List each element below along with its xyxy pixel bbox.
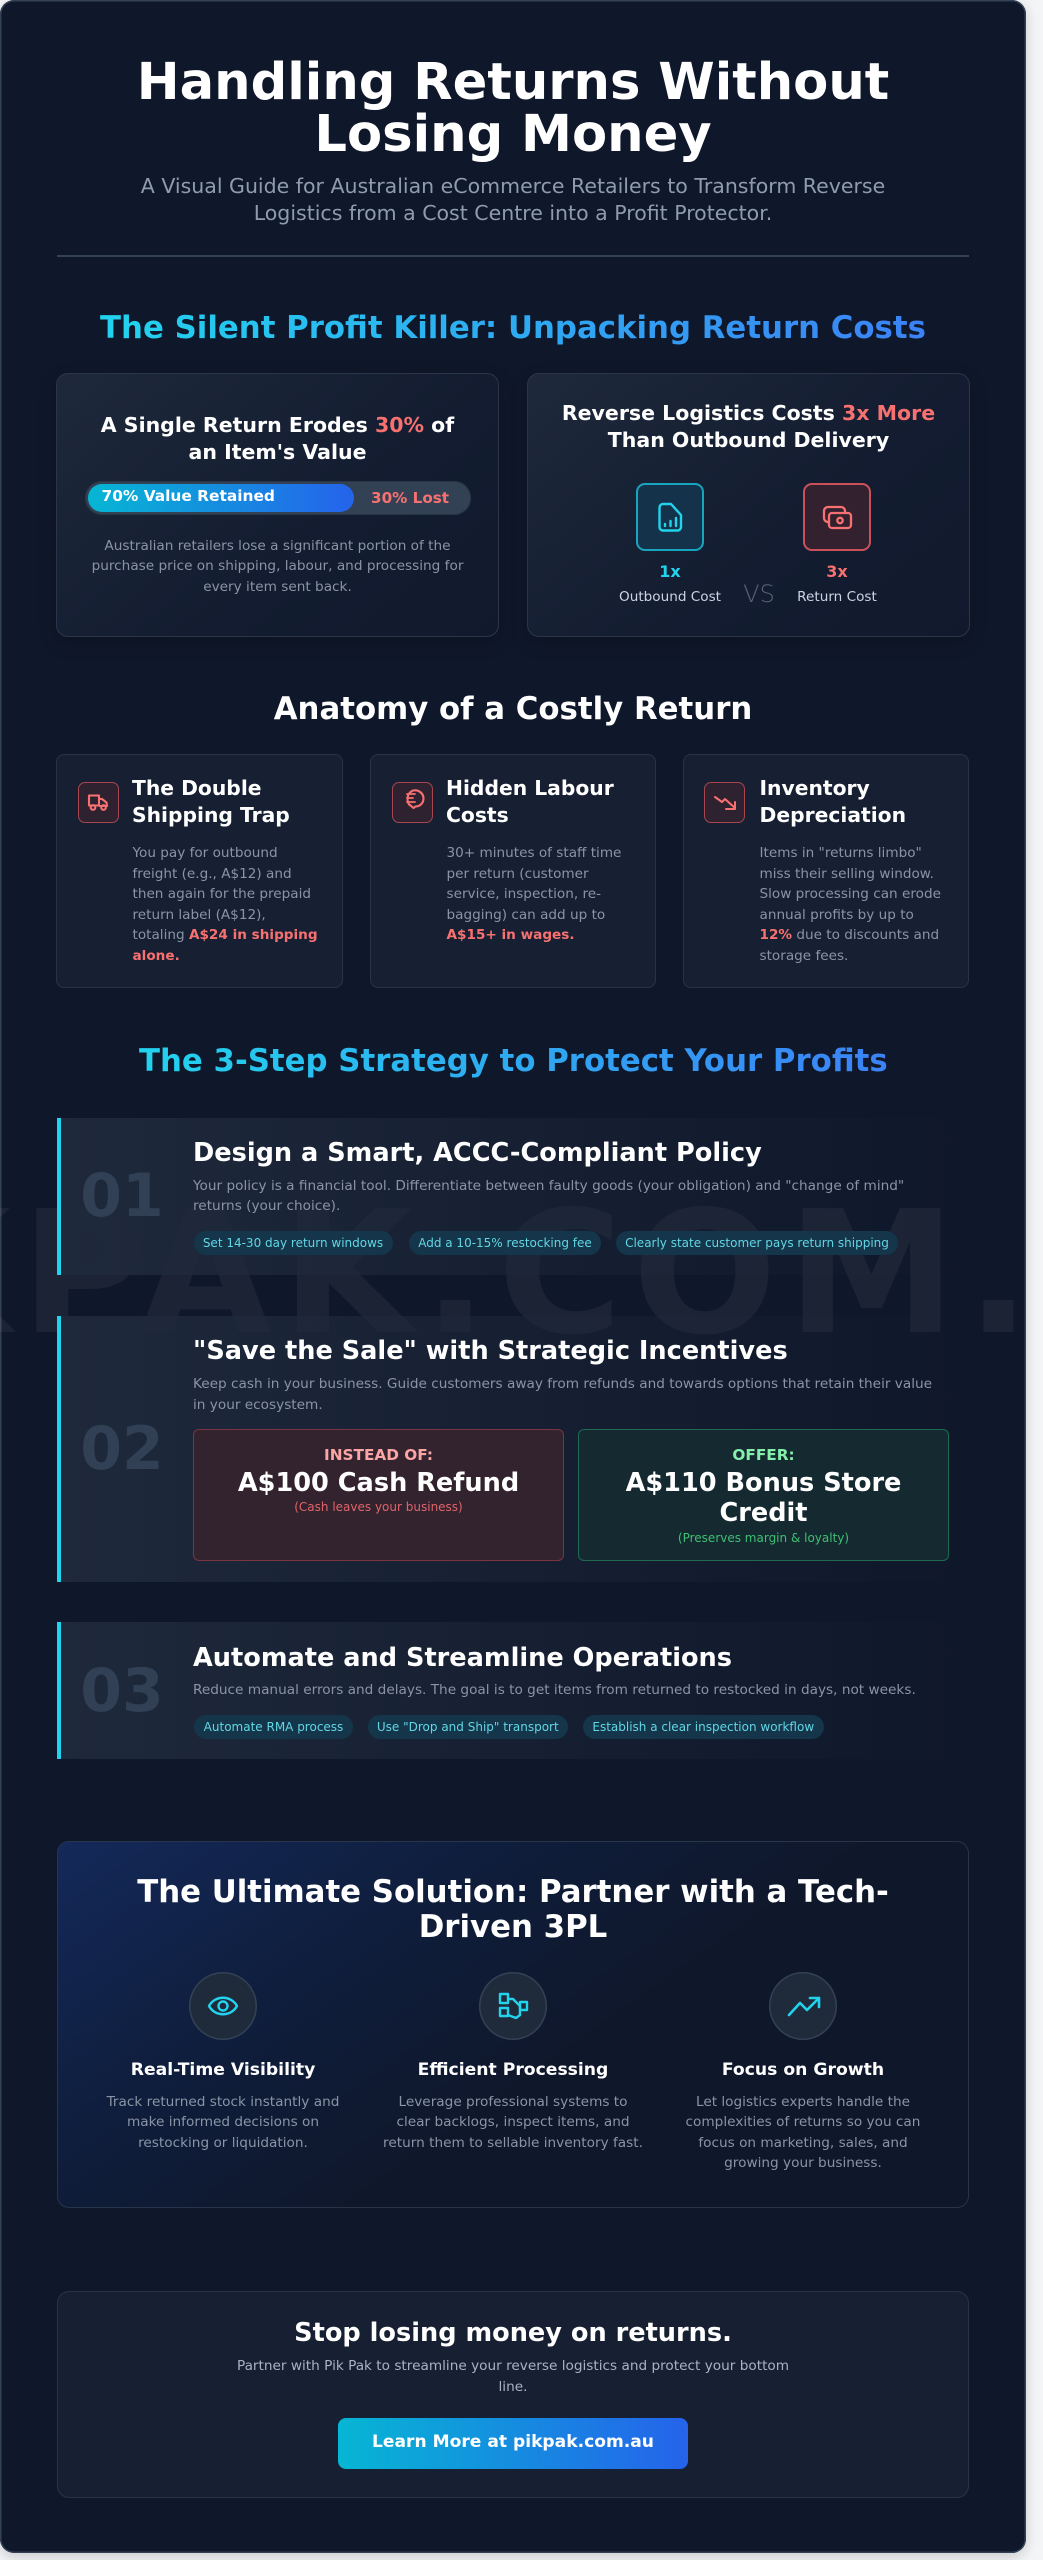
benefit text: make informed decisions on bbox=[127, 2114, 319, 2130]
step title: Automate and Streamline Operations bbox=[193, 1643, 732, 1673]
icon: return money bbox=[803, 483, 871, 551]
card text bbox=[446, 845, 621, 943]
icon: outbound file chart bbox=[636, 483, 704, 551]
panel text: purchase price on shipping, labour, and processing for bbox=[92, 558, 463, 574]
step text: Reduce manual errors and delays. The goal is to get items from returned to restocked in days, not weeks. bbox=[193, 1682, 916, 1698]
pill: restocking fee bbox=[409, 1231, 601, 1255]
title bbox=[137, 52, 889, 164]
benefit text: restocking or liquidation. bbox=[138, 2135, 308, 2151]
panel heading bbox=[100, 413, 454, 464]
title: Handling Returns Without bbox=[137, 52, 889, 112]
step number: 03 bbox=[80, 1656, 164, 1726]
card: hidden labour costs bbox=[370, 754, 656, 988]
panel heading: Reverse Logistics Costs 3x More bbox=[562, 401, 935, 425]
card text bbox=[760, 845, 941, 964]
card text: alone. bbox=[132, 948, 180, 964]
step 2: save the sale bbox=[57, 1316, 969, 1582]
benefit text bbox=[686, 2094, 920, 2171]
pill: RMA: Automate RMA process bbox=[204, 1720, 343, 1734]
card text: bagging) can add up to bbox=[446, 907, 605, 923]
panel: reverse logistics costs bbox=[527, 373, 970, 637]
pill: RMA bbox=[194, 1715, 353, 1739]
card text: per return (customer bbox=[446, 866, 589, 882]
card title: Depreciation bbox=[760, 803, 906, 827]
panel: call to action bbox=[57, 2291, 969, 2498]
card text: Slow processing can erode bbox=[760, 886, 941, 902]
card text: service, inspection, re- bbox=[446, 886, 601, 902]
pill: inspection workflow bbox=[582, 1715, 824, 1739]
benefit text: focus on marketing, sales, and bbox=[698, 2135, 908, 2151]
card text: annual profits by up to bbox=[760, 907, 914, 923]
benefit text: clear backlogs, inspect items, and bbox=[396, 2114, 630, 2130]
benefit title: Efficient Processing bbox=[418, 2060, 608, 2080]
step 1: policy bbox=[57, 1118, 969, 1275]
panel title bbox=[137, 1874, 889, 1945]
CTA title: Stop losing money on returns. bbox=[294, 2318, 732, 2348]
step text: Your policy is a financial tool. Differentiate between faulty goods (your obligation) and "change of mind" bbox=[193, 1178, 904, 1194]
benefit text: complexities of returns so you can bbox=[686, 2114, 920, 2130]
benefit title: Focus on Growth bbox=[722, 2060, 884, 2080]
card title: The Double bbox=[132, 776, 262, 800]
icon: trending up bbox=[769, 1972, 837, 2040]
heading: 3-step strategy: The 3-Step Strategy to Protect Your Profits bbox=[139, 1043, 888, 1079]
card text: then again for the prepaid bbox=[132, 886, 311, 902]
card text: miss their selling window. bbox=[760, 866, 934, 882]
panel text bbox=[92, 538, 464, 595]
card text: totaling A$24 in shipping bbox=[132, 927, 318, 943]
icon: processing bbox=[479, 1972, 547, 2040]
pill: restocking fee: Add a 10-15% restocking fee bbox=[418, 1236, 592, 1250]
card title: Costs bbox=[446, 803, 509, 827]
progress bar bbox=[85, 481, 471, 515]
card: inventory depreciation bbox=[683, 754, 969, 988]
CTA text: Partner with Pik Pak to streamline your reverse logistics and protect your bottom bbox=[237, 2358, 789, 2374]
panel text: every item sent back. bbox=[203, 579, 352, 595]
card text bbox=[132, 845, 318, 964]
card text: storage fees. bbox=[760, 948, 848, 964]
step title: Design a Smart, ACCC-Compliant Policy bbox=[193, 1138, 762, 1168]
card text: 12% due to discounts and bbox=[760, 927, 939, 943]
card text: return label (A$12), bbox=[132, 907, 266, 923]
card title: Inventory bbox=[760, 776, 870, 800]
step number: 02 bbox=[80, 1414, 164, 1484]
amount: Credit bbox=[719, 1498, 808, 1528]
card text: Items in "returns limbo" bbox=[760, 845, 922, 861]
CTA text: line. bbox=[499, 2378, 527, 2394]
panel text: Australian retailers lose a significant portion of the bbox=[104, 538, 451, 554]
benefit text: Track returned stock instantly and bbox=[107, 2094, 339, 2110]
panel: ultimate solution bbox=[57, 1841, 969, 2208]
icon: truck bbox=[78, 782, 118, 823]
pill: return windows bbox=[194, 1231, 392, 1255]
CTA button: Learn More at pikpak.com.au bbox=[372, 2432, 654, 2452]
note: (Cash leaves your business) bbox=[294, 1500, 463, 1514]
step text: Keep cash in your business. Guide customers away from refunds and towards options that retain their value bbox=[193, 1376, 932, 1392]
step text bbox=[193, 1376, 932, 1412]
stat: 3x: 3x bbox=[826, 562, 848, 580]
benefit title: Real-Time Visibility bbox=[131, 2060, 315, 2080]
benefit text bbox=[383, 2094, 643, 2151]
benefit text: Let logistics experts handle the bbox=[696, 2094, 910, 2110]
panel heading: A Single Return Erodes 30% of bbox=[101, 413, 454, 437]
card title: Shipping Trap bbox=[132, 803, 290, 827]
pill: return shipping: Clearly state customer pays return shipping bbox=[625, 1236, 889, 1250]
benefit text: return them to sellable inventory fast. bbox=[383, 2135, 643, 2151]
step title: "Save the Sale" with Strategic Incentives bbox=[193, 1336, 788, 1366]
card title bbox=[446, 776, 614, 827]
benefit text bbox=[106, 2094, 339, 2151]
panel heading: Than Outbound Delivery bbox=[608, 428, 889, 452]
icon: eye bbox=[189, 1972, 257, 2040]
amount bbox=[626, 1468, 901, 1528]
comparison: store credit bbox=[578, 1429, 949, 1561]
pill: drop and ship bbox=[368, 1715, 568, 1739]
panel heading bbox=[562, 401, 935, 452]
card title bbox=[132, 776, 290, 827]
label: OFFER: bbox=[732, 1446, 795, 1464]
subtitle: A Visual Guide for Australian eCommerce Retailers to Transform Reverse bbox=[141, 174, 885, 198]
step 3: automate bbox=[57, 1622, 969, 1759]
subtitle: Logistics from a Cost Centre into a Profit Protector. bbox=[254, 201, 772, 225]
benefit text: growing your business. bbox=[724, 2155, 882, 2171]
note: (Preserves margin & loyalty) bbox=[678, 1531, 849, 1545]
pill: drop and ship: Use "Drop and Ship" transport bbox=[377, 1720, 559, 1734]
heading: silent profit killer: The Silent Profit Killer: Unpacking Return Costs bbox=[100, 310, 926, 346]
card text: freight (e.g., A$12) and bbox=[132, 866, 292, 882]
title: Losing Money bbox=[314, 104, 712, 164]
icon: trending down bbox=[704, 782, 745, 823]
heading: anatomy: Anatomy of a Costly Return bbox=[274, 691, 752, 727]
card: double shipping trap bbox=[56, 754, 343, 988]
label: return cost: Return Cost bbox=[797, 589, 877, 605]
pill: return windows: Set 14-30 day return windows bbox=[203, 1236, 383, 1250]
panel heading: an Item's Value bbox=[188, 440, 366, 464]
benefit text: Leverage professional systems to bbox=[398, 2094, 628, 2110]
step text: in your ecosystem. bbox=[193, 1396, 323, 1412]
label: INSTEAD OF: bbox=[324, 1446, 433, 1464]
stat: 1x: 1x bbox=[659, 562, 681, 580]
pill: inspection workflow: Establish a clear inspection workflow bbox=[592, 1720, 814, 1734]
retained label: 70% Value Retained bbox=[102, 487, 275, 505]
panel: 30 percent value erosion bbox=[56, 373, 499, 637]
panel title: Driven 3PL bbox=[419, 1909, 607, 1945]
pill: return shipping bbox=[616, 1231, 898, 1255]
card text: 30+ minutes of staff time bbox=[446, 845, 621, 861]
step number: 01 bbox=[80, 1161, 164, 1231]
subtitle bbox=[141, 174, 885, 225]
card text: A$15+ in wages. bbox=[446, 927, 575, 943]
amount: A$100 Cash Refund bbox=[238, 1468, 519, 1498]
step text: returns (your choice). bbox=[193, 1198, 340, 1214]
comparison: cash refund bbox=[193, 1429, 564, 1561]
CTA text bbox=[237, 2358, 789, 2394]
card title: Hidden Labour bbox=[446, 776, 614, 800]
label: outbound cost: Outbound Cost bbox=[619, 589, 721, 605]
CTA button bbox=[338, 2418, 688, 2469]
panel title: The Ultimate Solution: Partner with a Tech- bbox=[137, 1874, 889, 1910]
bar fill bbox=[88, 484, 354, 512]
step text bbox=[193, 1178, 904, 1214]
amount: A$110 Bonus Store bbox=[626, 1468, 901, 1498]
lost label: 30% Lost bbox=[371, 489, 449, 507]
card text: You pay for outbound bbox=[132, 845, 278, 861]
card title bbox=[760, 776, 906, 827]
icon: labour coin bbox=[392, 782, 432, 823]
versus label: VS bbox=[743, 580, 775, 608]
